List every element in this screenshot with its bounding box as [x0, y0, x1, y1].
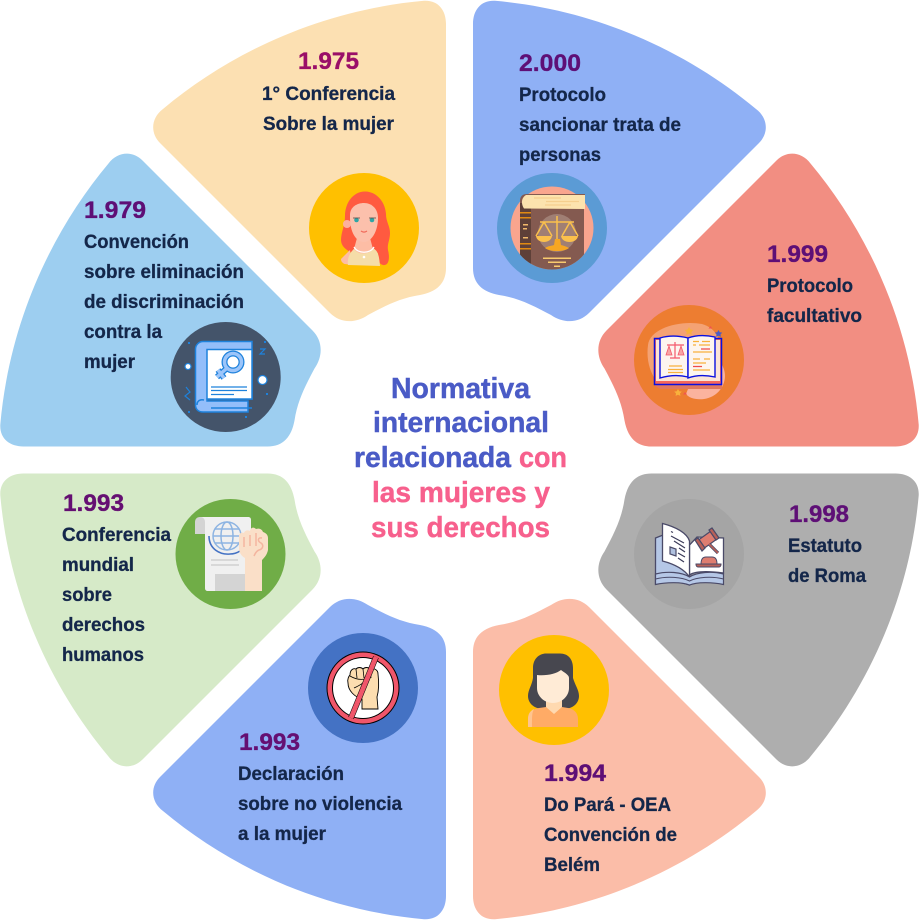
icon: law book with scales	[497, 173, 607, 283]
description: 1993 conference: humanos	[62, 644, 144, 666]
title: relacionada	[354, 442, 512, 474]
petal shape: blue	[153, 599, 446, 919]
petal shape: salmon	[598, 154, 919, 446]
title: con	[519, 442, 567, 474]
year: 1993 declaration: 1.993	[239, 729, 300, 756]
description: 1975	[262, 83, 395, 135]
description: 1993 conference	[62, 524, 171, 666]
icon: book and gavel	[634, 499, 744, 609]
description: 1975: Sobre la mujer	[263, 113, 394, 135]
description: 1998: de Roma	[788, 565, 866, 587]
description: 1999	[767, 275, 862, 327]
year: 1975: 1.975	[298, 48, 359, 75]
title: las mujeres y	[372, 477, 550, 509]
panel: 1993 declaration	[153, 599, 446, 919]
description: 1993 conference: mundial	[62, 554, 134, 576]
description: 2000: Protocolo	[519, 84, 606, 106]
panel: 1999 optional protocol	[598, 154, 919, 446]
description: 1979: contra la	[84, 321, 162, 343]
title: sus derechos	[371, 512, 550, 544]
description: 1993 conference: derechos	[62, 614, 145, 636]
description: 1994: Belém	[544, 854, 600, 876]
description: 2000	[519, 84, 681, 166]
petal shape: peach	[153, 1, 446, 321]
title: internacional	[373, 407, 549, 439]
description: 1999: facultativo	[767, 305, 862, 327]
year: 1994: 1.994	[544, 760, 606, 787]
description: 1993 declaration: sobre no violencia	[238, 793, 402, 815]
description: 1994: Do Pará - OEA	[544, 794, 671, 816]
description: 1975: 1° Conferencia	[262, 83, 395, 105]
year: 1998: 1.998	[789, 501, 849, 528]
description: 1994	[544, 794, 677, 876]
panel: 1993 world conference	[0, 474, 321, 766]
description: 1993 conference: Conferencia	[62, 524, 171, 546]
panel: 1994 Belem do Para	[473, 599, 766, 919]
panel: 1979 CEDAW convention	[0, 154, 321, 446]
title: Normativa	[391, 373, 531, 405]
description: 1993 conference: sobre	[62, 584, 112, 606]
description: 1993 declaration	[238, 763, 402, 845]
petal shape: green	[0, 474, 321, 766]
description: 1999: Protocolo	[767, 275, 853, 297]
panel: 1975 conference	[153, 1, 446, 321]
description: 1979: sobre eliminación	[84, 261, 244, 283]
description: 1979: de discriminación	[84, 291, 244, 313]
icon: book with female symbol	[171, 322, 281, 432]
petal shape: gray	[598, 474, 919, 766]
petal shape: blue	[473, 1, 766, 321]
description: 1979: mujer	[84, 351, 135, 373]
panel: 1998 Rome statute	[598, 474, 919, 766]
year: 2000: 2.000	[519, 50, 581, 77]
description: 1998: Estatuto	[788, 535, 862, 557]
description: 1993 declaration: a la mujer	[238, 823, 326, 845]
description: 2000: personas	[519, 144, 601, 166]
description: 2000: sancionar trata de	[519, 114, 681, 136]
description: 1979	[84, 231, 244, 373]
icon: open legal book	[634, 305, 744, 415]
title	[354, 373, 567, 544]
petal shape: sky blue	[0, 154, 321, 446]
icon: red-haired woman	[309, 173, 419, 283]
icon: dark-haired woman	[499, 635, 609, 745]
year: 1993 conference: 1.993	[63, 490, 124, 517]
icon: prohibited fist	[308, 633, 418, 743]
year: 1979: 1.979	[84, 197, 146, 224]
description: 1998	[788, 535, 866, 587]
description: 1993 declaration: Declaración	[238, 763, 344, 785]
panel: 2000 protocol	[473, 1, 766, 321]
icon: document, globe and raised fist	[176, 499, 286, 609]
petal shape: light salmon	[473, 599, 766, 919]
description: 1979: Convención	[84, 231, 189, 253]
year: 1999: 1.999	[767, 241, 828, 268]
description: 1994: Convención de	[544, 824, 677, 846]
